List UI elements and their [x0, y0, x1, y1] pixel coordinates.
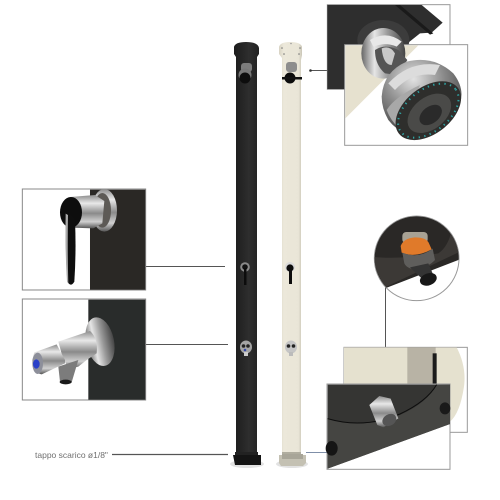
- panel: push tap detail: [22, 299, 146, 400]
- leader dot: [309, 69, 312, 72]
- back panel: cream base: [344, 347, 467, 432]
- panel: shower head detail: [327, 5, 472, 152]
- shower head: [382, 60, 472, 152]
- black column lever tap: [240, 262, 250, 285]
- threaded plug: [369, 396, 399, 429]
- cream column push tap: [285, 340, 297, 356]
- lever tap: [60, 189, 117, 285]
- back panel: dark column corner: [327, 5, 450, 89]
- orange hose connector: [401, 232, 439, 288]
- front panel: [345, 45, 468, 145]
- label: drain plug: tappo scarico ø1/8": [35, 450, 108, 460]
- push tap: [32, 315, 119, 384]
- leader lines: [112, 70, 386, 454]
- chrome wall mount: [361, 28, 407, 79]
- black column push tap: [240, 340, 252, 356]
- panel: drain plug detail: [326, 347, 467, 469]
- black column shower head: [238, 63, 252, 84]
- panel: hose connector detail: [374, 216, 460, 302]
- cream column lever tap: [285, 262, 295, 284]
- black shower column: [230, 42, 264, 468]
- front panel: [326, 384, 450, 469]
- cream column shower head: [282, 62, 302, 84]
- cream shower column: [276, 42, 308, 468]
- panel: lever tap detail: [22, 189, 146, 290]
